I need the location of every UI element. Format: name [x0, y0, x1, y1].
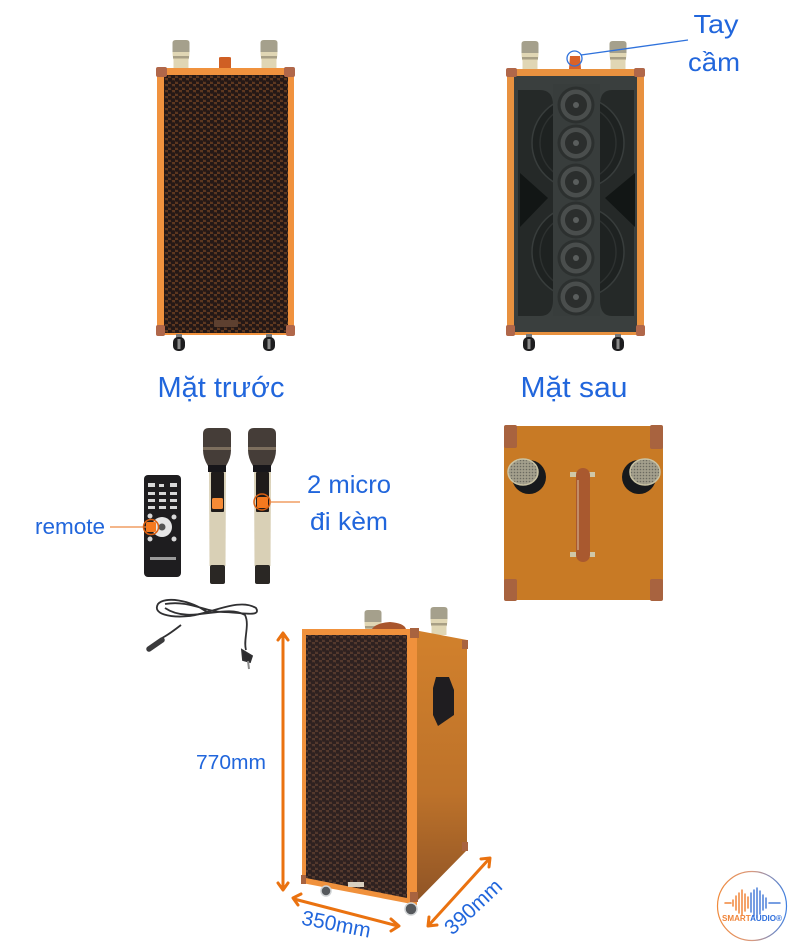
label: remote: remote [35, 514, 105, 539]
remote control [144, 475, 181, 577]
callout: remote [110, 520, 158, 534]
callout: handle [567, 40, 688, 66]
logo: SmartAudio [718, 872, 786, 940]
microphone 1 [203, 428, 231, 584]
orange cabinet [157, 68, 294, 335]
leather handle [372, 622, 406, 629]
microphone 2 [248, 428, 276, 584]
rear speaker [506, 41, 645, 351]
remote buttons [148, 483, 177, 542]
wheels [321, 886, 417, 915]
wheels [523, 334, 624, 351]
right mic from above [622, 459, 660, 494]
front frame [302, 629, 417, 905]
microphones on top [522, 41, 626, 69]
label: height: 770mm [196, 752, 266, 774]
remote logo [150, 557, 176, 560]
central baffle [553, 84, 600, 316]
mic orange button [257, 497, 268, 508]
logo waveform [725, 888, 780, 918]
callout: microphones [254, 494, 300, 510]
dimension arrow: depth [428, 858, 490, 926]
label: handle: cầm [688, 47, 740, 77]
side panel [414, 630, 467, 902]
left mic from above [508, 459, 546, 494]
inner cavity [514, 76, 637, 332]
label: depth: 390mm [440, 875, 507, 940]
top view of speaker [504, 425, 663, 601]
brand badge [214, 320, 238, 327]
leather handle [570, 468, 595, 562]
label: microphones: 2 micro [307, 471, 391, 499]
metal corners [156, 67, 295, 336]
wheels [173, 334, 275, 351]
orange cabinet [507, 69, 644, 335]
logo wordmark: SMARTAUDIO® [722, 914, 782, 923]
front speaker [156, 40, 295, 351]
front grille [306, 635, 407, 898]
label: handle [688, 9, 740, 77]
angled speaker [301, 607, 468, 915]
power cable [149, 600, 257, 669]
brand badge [348, 882, 364, 887]
plug [149, 640, 162, 649]
side ports [520, 173, 635, 227]
metal corners [506, 68, 645, 336]
tweeter column [558, 86, 594, 316]
side recesses [518, 90, 634, 316]
side port [433, 677, 454, 726]
heading: rear: Mặt sau [520, 372, 628, 404]
label: microphones [307, 471, 391, 536]
metal corners [301, 628, 468, 902]
front grille [164, 75, 288, 333]
carry handle [219, 57, 231, 68]
label: microphones: đi kèm [310, 508, 388, 536]
label: width: 350mm [300, 907, 373, 943]
dimension arrow: width [293, 894, 399, 931]
label: handle: Tay [694, 9, 738, 39]
microphones on top [364, 607, 448, 638]
dimension arrow: height [278, 633, 288, 890]
mic orange button [212, 498, 223, 509]
heading: front: Mặt trước [158, 372, 284, 404]
woofers [532, 97, 624, 298]
top corners [504, 425, 663, 601]
microphones on top [172, 40, 278, 68]
carry handle [569, 56, 581, 69]
